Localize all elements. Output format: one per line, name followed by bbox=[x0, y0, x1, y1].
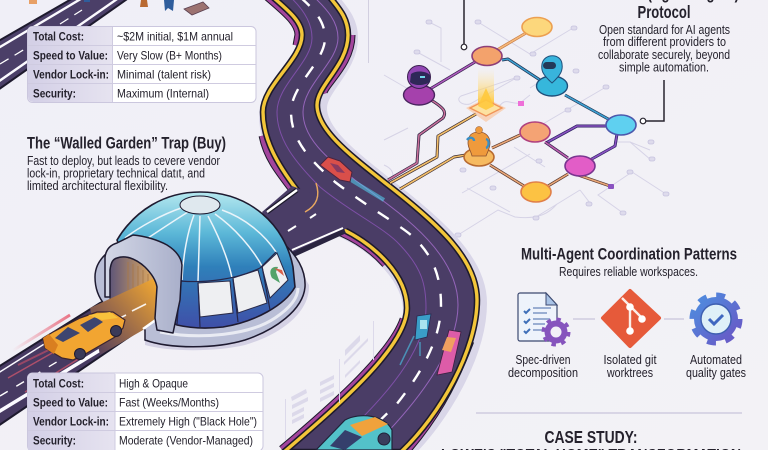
lane lines bbox=[277, 0, 426, 420]
row: vendor lock-in bbox=[33, 68, 211, 82]
text: walled garden description: limited architectural flexibility. bbox=[27, 179, 168, 193]
table: build option bbox=[28, 26, 256, 102]
row: total cost bbox=[33, 30, 233, 44]
tunnel road bbox=[90, 277, 157, 355]
heading: A2A protocol bbox=[591, 0, 739, 22]
dome base ring bbox=[95, 235, 305, 347]
tunnel wall stripes bbox=[128, 262, 148, 290]
icon: teal car bbox=[316, 416, 392, 450]
node: blue agent bbox=[536, 56, 568, 96]
label: automated quality gates bbox=[686, 353, 746, 380]
connector line bbox=[664, 318, 684, 320]
row: security: Security: bbox=[33, 434, 76, 448]
road shadow bbox=[266, 0, 480, 450]
label: isolated git worktrees: Isolated git bbox=[604, 353, 657, 367]
tunnel opening bbox=[110, 257, 157, 330]
heading: case study: CASE STUDY: bbox=[544, 427, 638, 447]
tunnel arch bbox=[105, 235, 182, 333]
row: total cost: High & Opaque bbox=[119, 376, 188, 390]
glass lower frame lines bbox=[177, 252, 276, 327]
icon: blue car bbox=[400, 314, 431, 365]
node: light blue right bbox=[606, 115, 636, 135]
row: speed to value: Speed to Value: bbox=[33, 396, 108, 410]
dome ribs bbox=[125, 207, 276, 282]
callout line: from top to network bbox=[461, 0, 467, 50]
divider above case study bbox=[476, 412, 742, 414]
node: pink orange middle bbox=[520, 122, 550, 142]
text: walled garden description: lock-in, proprietary technical datıt, and bbox=[27, 166, 205, 180]
row: vendor lock-in: Vendor Lock-in: bbox=[33, 414, 109, 428]
faint blueprint notes bbox=[285, 321, 374, 440]
icon: git diamond bbox=[603, 291, 659, 346]
row: security: Moderate (Vendor-Managed) bbox=[119, 434, 253, 448]
table: buy option bbox=[28, 373, 263, 450]
row: security bbox=[33, 434, 253, 448]
row: speed to value: Very Slow (B+ Months) bbox=[117, 48, 222, 62]
road: lower left tunnel road bbox=[0, 276, 160, 428]
node: orange agent bbox=[464, 126, 494, 166]
text: A2A description: from different providers to bbox=[603, 35, 726, 49]
icon: red car on highway bbox=[320, 157, 384, 200]
connector: lines to highway bbox=[388, 33, 617, 189]
connector line bbox=[573, 318, 595, 320]
row: security bbox=[33, 86, 209, 100]
icon: quality gear bbox=[692, 295, 740, 343]
yellow edge line bbox=[263, 0, 477, 450]
logo bbox=[270, 267, 284, 283]
magenta verge segments bbox=[266, 0, 467, 450]
text: requires reliable workspaces: Requires reliable workspaces. bbox=[559, 265, 698, 279]
node: pink orange upper bbox=[472, 46, 502, 66]
row: total cost: Total Cost: bbox=[33, 376, 84, 390]
node: orange top bbox=[522, 18, 552, 36]
label: spec-driven decomposition: Spec-driven bbox=[516, 353, 571, 367]
row: vendor lock-in bbox=[33, 414, 257, 428]
faint circuit lines bbox=[384, 22, 666, 235]
figures at top edge bbox=[29, 0, 209, 15]
dome base ring shadow bbox=[145, 270, 309, 350]
node: magenta bbox=[565, 156, 595, 176]
text: A2A description: simple automation. bbox=[619, 60, 709, 74]
node: glowing diamond with beam bbox=[466, 68, 506, 122]
row: vendor lock-in: Vendor Lock-in: bbox=[33, 68, 109, 82]
row: vendor lock-in: Extremely High ("Black Hole") bbox=[119, 414, 257, 428]
row: total cost: Total Cost: bbox=[33, 30, 84, 44]
dome cap bbox=[180, 196, 220, 214]
row: security: Security: bbox=[33, 86, 76, 100]
row: security: Maximum (Internal) bbox=[117, 86, 209, 100]
row: speed to value: Fast (Weeks/Months) bbox=[119, 396, 219, 410]
row: vendor lock-in: Minimal (talent risk) bbox=[117, 68, 211, 82]
small node dots bbox=[518, 101, 614, 189]
label: automated quality gates: Automated bbox=[690, 353, 742, 367]
text: walled garden description: Fast to deploy, but leads to cevere vendor bbox=[27, 154, 220, 168]
text: A2A description bbox=[598, 23, 730, 74]
asphalt bbox=[263, 0, 477, 450]
row: speed to value: Speed to Value: bbox=[33, 48, 108, 62]
label: spec-driven decomposition bbox=[508, 353, 578, 380]
heading: A2A protocol: Protocol bbox=[638, 2, 690, 22]
text: A2A description: Open standard for AI agents bbox=[599, 23, 730, 37]
label: isolated git worktrees: worktrees bbox=[606, 366, 653, 380]
text: A2A description: collaborate securely, beyond bbox=[598, 48, 730, 62]
label: isolated git worktrees bbox=[604, 353, 657, 380]
row: speed to value bbox=[33, 396, 219, 410]
node: yellow bottom bbox=[521, 182, 551, 202]
circuit end points bbox=[414, 20, 669, 237]
divider line near network bbox=[368, 0, 370, 63]
node: purple agent bbox=[404, 66, 434, 105]
road: upper left build road bbox=[0, 0, 130, 92]
heading: walled garden trap: The “Walled Garden” Trap (Buy) bbox=[27, 134, 226, 152]
icon: yellow sports car bbox=[12, 312, 125, 365]
centre dashes bbox=[291, 0, 441, 450]
row: total cost bbox=[33, 376, 188, 390]
label: spec-driven decomposition: decomposition bbox=[508, 366, 578, 380]
row: speed to value bbox=[33, 48, 222, 62]
callout line: A2A text to node bbox=[640, 80, 664, 124]
illustration: glass dome bbox=[90, 192, 309, 355]
glass shell bbox=[117, 192, 295, 328]
road: main winding highway bbox=[263, 0, 480, 450]
row: total cost: ~$2M initial, $1M annual bbox=[117, 30, 233, 44]
icon: spec document with gear bbox=[518, 293, 568, 344]
white panels bbox=[198, 253, 288, 317]
road: branch to dome bbox=[262, 183, 352, 256]
label: automated quality gates: quality gates bbox=[686, 366, 746, 380]
heading: case study bbox=[441, 427, 741, 450]
diagram: agent network bbox=[388, 18, 636, 202]
text: walled garden description bbox=[27, 154, 220, 193]
icon: pink car bbox=[437, 330, 461, 375]
